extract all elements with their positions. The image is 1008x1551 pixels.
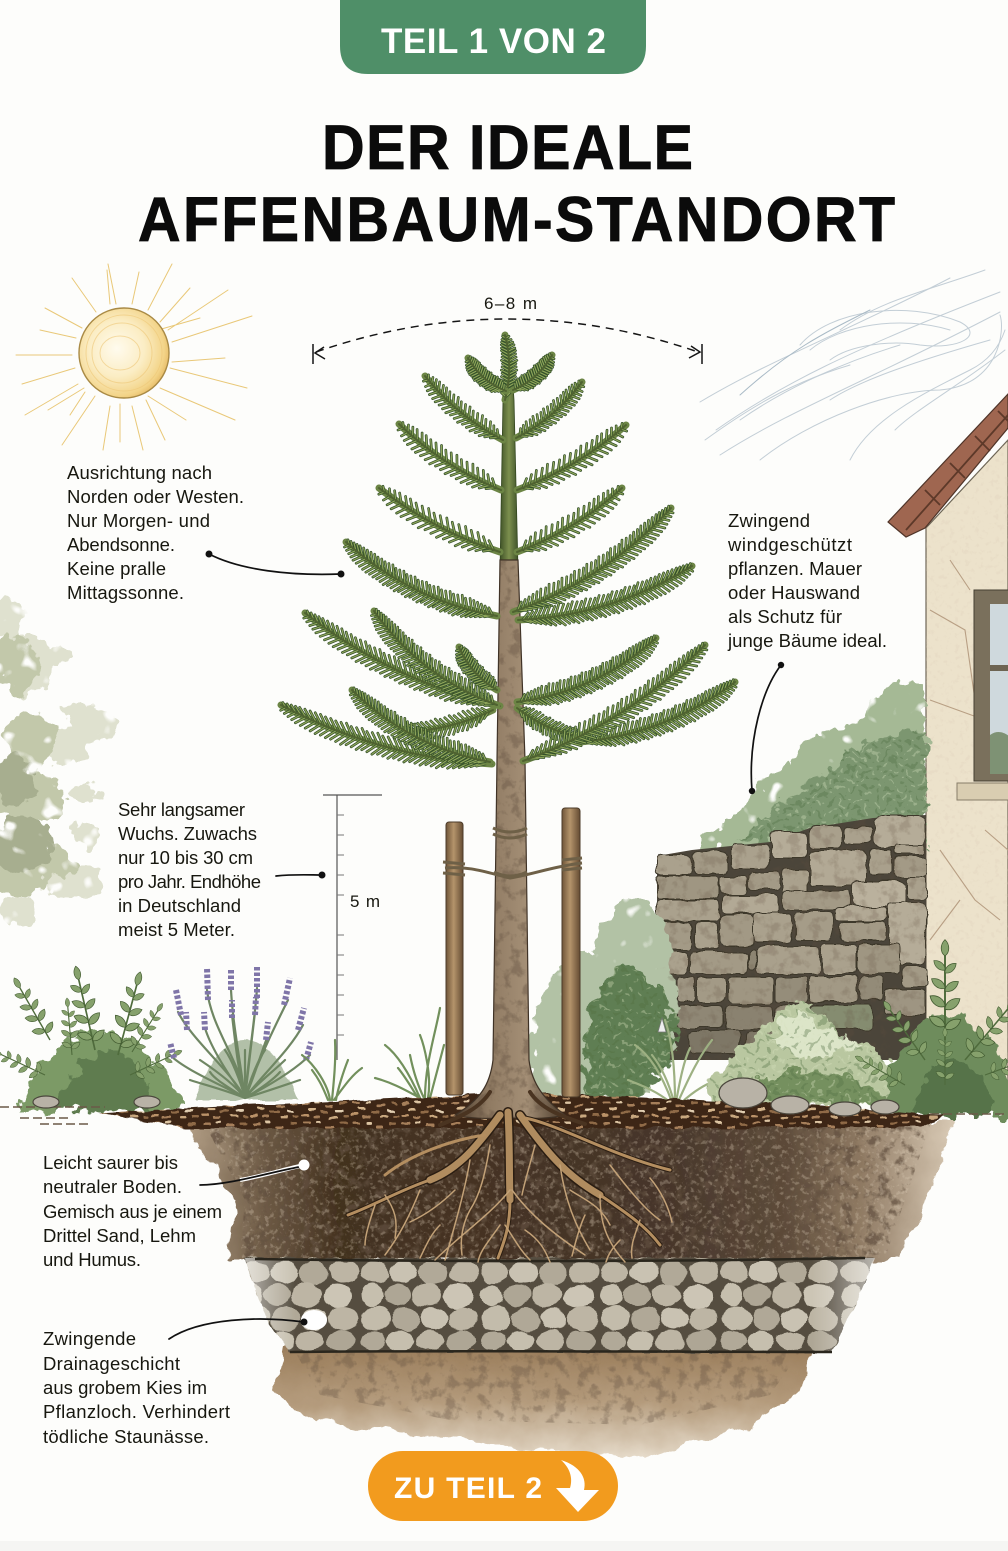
gravel drainage layer: [245, 1258, 875, 1352]
callout: wind protection: windgeschützt: [727, 534, 852, 555]
callout: orientation: Norden oder Westen.: [67, 486, 244, 507]
callout: growth: [118, 799, 326, 940]
callout: soil: neutraler Boden.: [43, 1176, 182, 1197]
callout: orientation: Ausrichtung nach: [67, 462, 212, 483]
callout: wind protection: junge Bäume ideal.: [727, 630, 887, 651]
top tab: part 1 of 2: [340, 0, 646, 74]
callout: soil: [43, 1152, 310, 1270]
callout: wind protection: als Schutz für: [728, 606, 842, 627]
callout: orientation: Abendsonne.: [67, 534, 175, 555]
house window: [974, 590, 1008, 781]
tie: [443, 828, 582, 878]
callout: growth: meist 5 Meter.: [118, 919, 235, 940]
callout: orientation: [67, 462, 344, 603]
icon: sun: [16, 264, 252, 450]
callout: soil: und Humus.: [43, 1249, 141, 1270]
tree stakes and tie: [446, 808, 580, 1097]
white flower: [658, 1018, 666, 1032]
callout: wind protection: oder Hauswand: [728, 582, 860, 603]
stone wall: [657, 815, 926, 1060]
icon: curved arrow: [556, 1460, 599, 1512]
house roof: [888, 394, 1008, 537]
callout: drainage: Zwingende: [43, 1328, 136, 1349]
callout: soil: Gemisch aus je einem: [43, 1201, 222, 1222]
callout: growth: in Deutschland: [118, 895, 241, 916]
soil cross-section: [0, 1094, 1008, 1458]
button: to part 2: [368, 1451, 618, 1521]
title: DER IDEALE: [322, 112, 693, 182]
dimension: crown width 6-8 m: 6–8 m: [484, 294, 537, 313]
icon: wind: [700, 270, 1005, 460]
callout: soil: Leicht saurer bis: [43, 1152, 178, 1173]
callout: drainage: aus grobem Kies im: [43, 1377, 207, 1398]
plant: lavender: [170, 965, 311, 1100]
callout: wind protection: [727, 510, 887, 794]
surface root flare: [440, 1092, 585, 1125]
house wall: [926, 440, 1008, 1110]
callout: orientation: Mittagssonne.: [67, 582, 184, 603]
callout: wind protection: Zwingend: [728, 510, 810, 531]
callout: growth: nur 10 bis 30 cm: [118, 847, 253, 868]
button: to part 2: ZU TEIL 2: [394, 1472, 542, 1505]
callout: drainage: Pflanzloch. Verhindert: [43, 1401, 230, 1422]
background tree left: [0, 600, 116, 924]
bush behind wall: [700, 682, 925, 850]
title: AFFENBAUM-STANDORT: [138, 184, 895, 254]
callout: growth: pro Jahr. Endhöhe: [118, 871, 261, 892]
callout: wind protection: pflanzen. Mauer: [728, 558, 862, 579]
upper soil layer: [185, 1122, 952, 1262]
callout: soil: Drittel Sand, Lehm: [43, 1225, 196, 1246]
callout: growth: Wuchs. Zuwachs: [118, 823, 257, 844]
plant: foreground bushes right: [705, 940, 1008, 1115]
plant: grasses: [302, 1008, 716, 1102]
callout: drainage: Drainageschicht: [43, 1353, 180, 1374]
branches: [275, 335, 743, 786]
trunk: [455, 560, 565, 1118]
house: [888, 394, 1008, 1110]
scale: growth height: [323, 795, 382, 1060]
upper leader: [500, 335, 518, 570]
rocks: [33, 1078, 899, 1116]
monkey puzzle tree: [275, 335, 743, 1118]
bush behind tree right: [529, 899, 674, 1100]
callout: orientation: Keine pralle: [67, 558, 166, 579]
lower subsoil: [275, 1345, 820, 1458]
callout: orientation: Nur Morgen- und: [67, 510, 210, 531]
scale: growth height: 5 m: [350, 892, 380, 911]
callout: drainage: [43, 1310, 327, 1447]
roots: [348, 1092, 672, 1262]
title: [138, 112, 895, 254]
callout: growth: Sehr langsamer: [118, 799, 245, 820]
plant: shrub left: [0, 963, 186, 1112]
dimension: crown width 6-8 m: [313, 294, 702, 364]
mulch layer: [100, 1094, 945, 1128]
callout: drainage: tödliche Staunässe.: [43, 1426, 209, 1447]
top tab: part 1 of 2: TEIL 1 VON 2: [381, 22, 606, 61]
